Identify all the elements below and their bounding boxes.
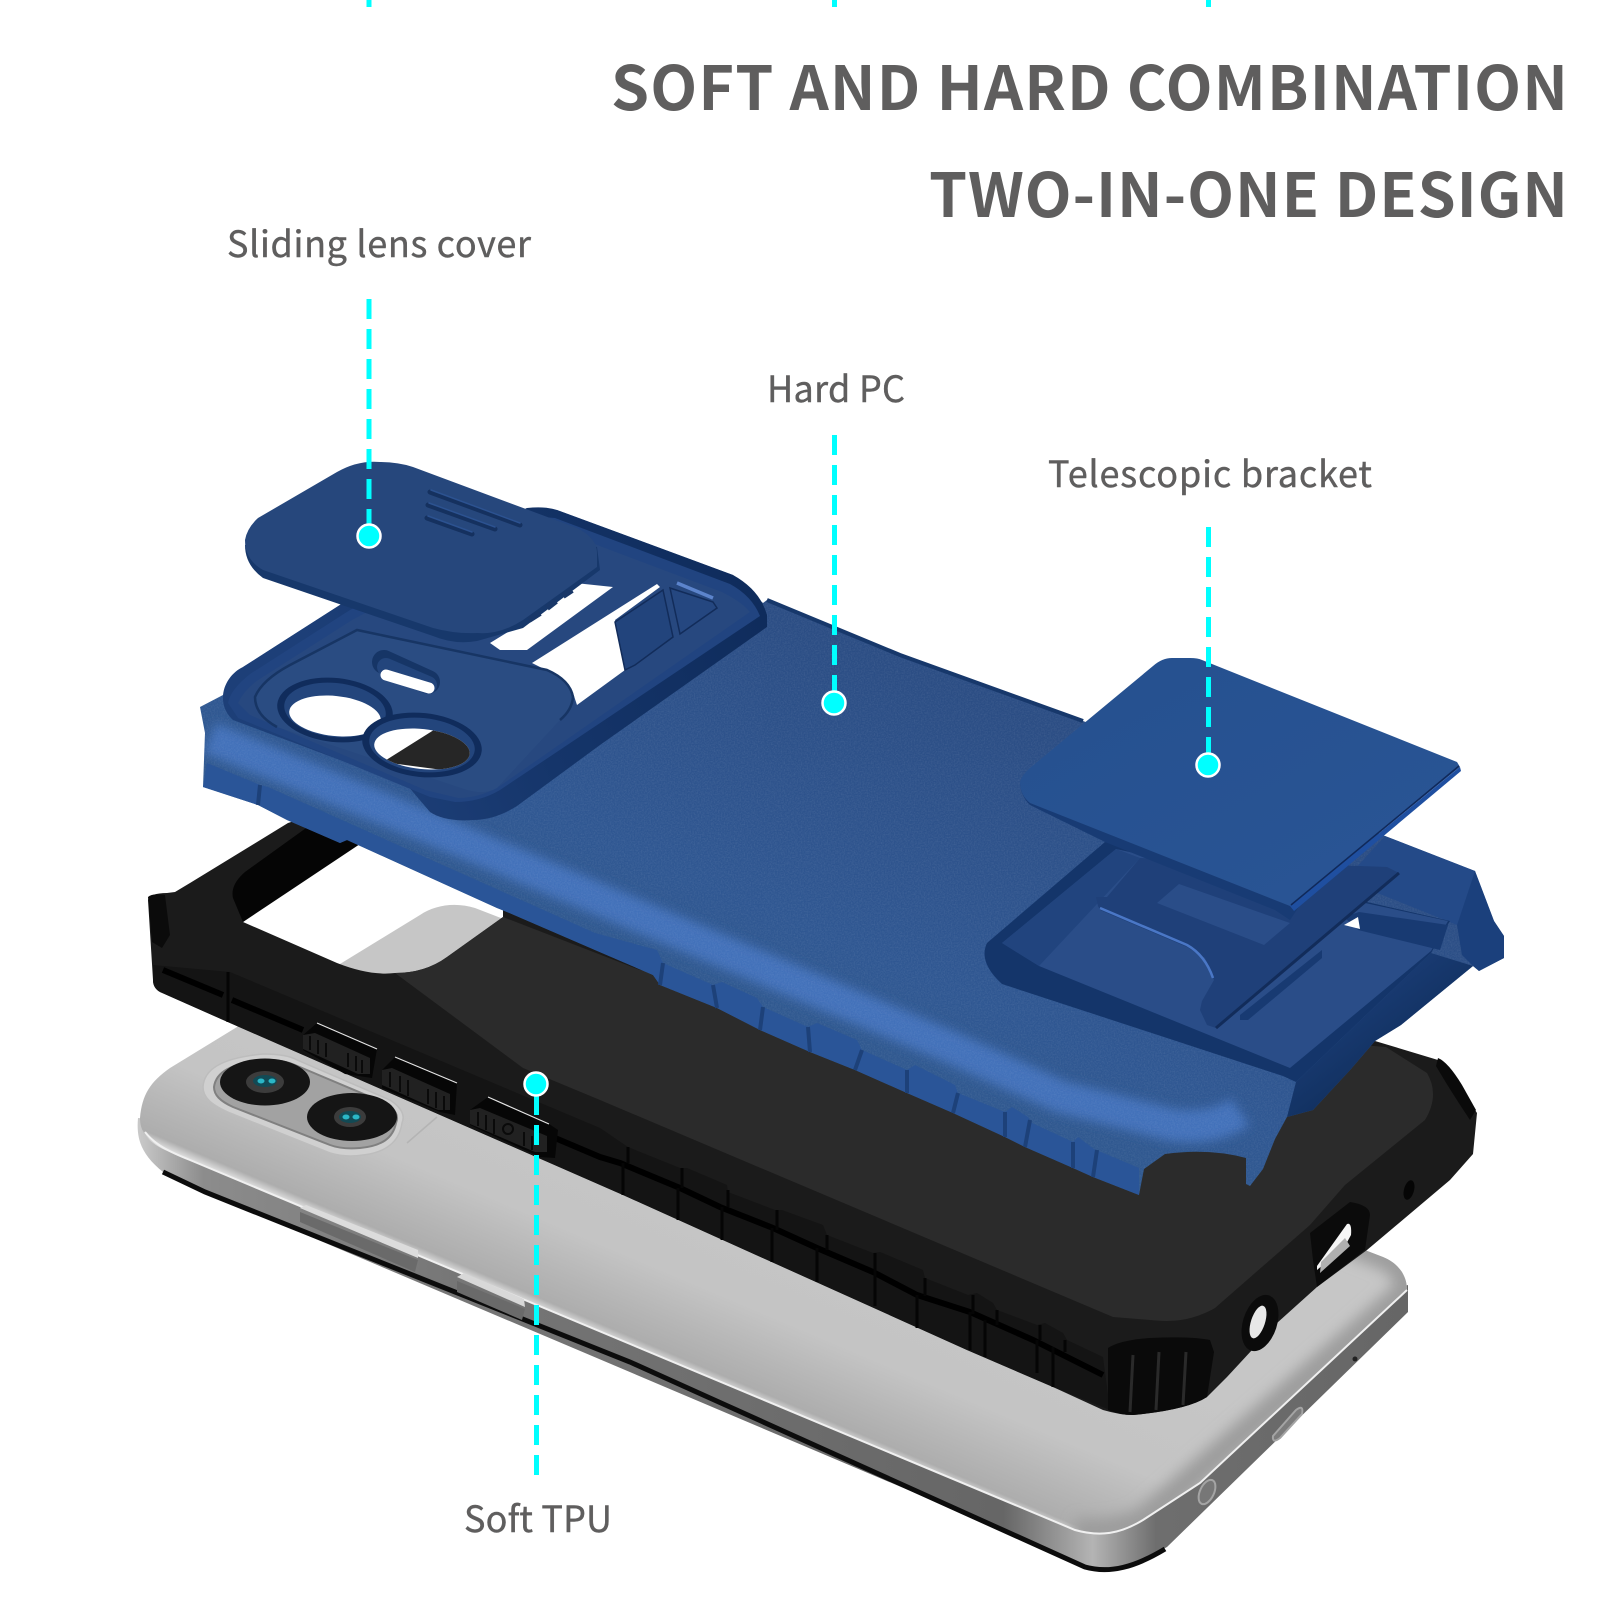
PC light textured band — [210, 738, 1240, 1126]
volume button plus — [303, 1023, 377, 1078]
slide rail windows — [490, 583, 613, 650]
marker dot — [1196, 754, 1220, 776]
plate right edge — [1290, 767, 1461, 911]
volume button minus — [382, 1057, 457, 1115]
leader line — [366, 299, 372, 530]
TPU top surface — [395, 917, 1433, 1321]
leader line — [534, 1095, 539, 1475]
phone ports — [1195, 1477, 1219, 1507]
USB port frame — [1310, 1202, 1370, 1287]
callout: sliding lens cover — [227, 216, 532, 548]
support bar — [1240, 950, 1322, 1020]
hard PC case — [190, 462, 1510, 1200]
lens hole two — [362, 712, 482, 778]
phone back face — [140, 905, 1407, 1534]
arm — [1096, 858, 1399, 1028]
module outline — [407, 1117, 437, 1143]
rubber tab top right — [1436, 1058, 1476, 1120]
TPU side groove — [163, 970, 1103, 1375]
sliding lens cover — [245, 462, 600, 642]
leader line — [1206, 527, 1211, 757]
frame floor — [238, 526, 750, 798]
bracket recess rim — [985, 842, 1450, 1082]
plate thickness — [1020, 770, 1300, 920]
phone edge highlights — [145, 1132, 1407, 1534]
corner body — [1108, 1337, 1214, 1415]
audio port ring — [1235, 1290, 1285, 1356]
soft TPU case — [148, 780, 1477, 1415]
lens hole one — [274, 672, 396, 748]
title — [611, 39, 1568, 235]
lens one — [220, 1058, 310, 1106]
label: Sliding lens cover — [227, 216, 532, 268]
phone side wall — [138, 1118, 1408, 1568]
lens two — [307, 1093, 397, 1141]
ribbed corner — [1108, 1337, 1214, 1415]
TPU side block ticks — [228, 972, 1065, 1387]
phone side buttons — [300, 1205, 418, 1258]
top line stubs — [369, 0, 1208, 7]
PC side wall ridges — [203, 763, 1139, 1195]
callout: telescopic bracket — [1048, 446, 1372, 776]
plate top — [1020, 658, 1460, 906]
camera module — [203, 1054, 437, 1156]
power button — [470, 1097, 558, 1158]
marker dot — [524, 1072, 548, 1096]
flash slot — [384, 662, 429, 688]
lens floor — [255, 630, 573, 792]
marker dot — [358, 524, 380, 548]
recess shaded wall — [1002, 849, 1140, 966]
right rail — [1344, 912, 1448, 950]
TPU case body — [148, 780, 1477, 1415]
phone — [138, 905, 1408, 1570]
cover top — [245, 462, 597, 633]
microphone hole — [1402, 1179, 1416, 1201]
label: Telescopic bracket — [1048, 446, 1372, 498]
leader line — [832, 435, 837, 695]
PC surface grain — [202, 602, 1470, 1192]
camera frame — [223, 507, 767, 820]
frame top surface — [228, 516, 760, 802]
callout: hard PC — [767, 361, 905, 714]
TPU side wall — [153, 965, 1110, 1410]
support panels — [615, 590, 673, 670]
right end tab — [1457, 871, 1504, 971]
right plate zone — [1345, 836, 1475, 925]
marker dot — [822, 692, 846, 714]
right end shade — [1287, 953, 1473, 1117]
arm edge highlights — [1100, 908, 1213, 978]
frame outer — [223, 507, 767, 820]
title line one: SOFT AND HARD COMBINATION — [611, 39, 1568, 128]
rubber tab top left — [148, 894, 170, 948]
PC case body — [200, 508, 1504, 1195]
title line two: TWO-IN-ONE DESIGN — [929, 146, 1568, 235]
label: Hard PC — [767, 361, 905, 413]
inner frame wall — [232, 800, 372, 922]
telescopic bracket — [985, 658, 1461, 1082]
phone face edge shading — [1075, 1240, 1407, 1531]
bracket recess floor — [1002, 849, 1448, 1068]
PC top edge shadow — [767, 600, 1083, 721]
lens pocket edge — [255, 630, 573, 727]
callout: soft TPU — [464, 1072, 612, 1543]
cover thickness — [245, 500, 600, 642]
label: Soft TPU — [464, 1491, 612, 1543]
cover grip ribs — [427, 492, 520, 534]
phone bottom black line — [163, 1172, 1165, 1570]
